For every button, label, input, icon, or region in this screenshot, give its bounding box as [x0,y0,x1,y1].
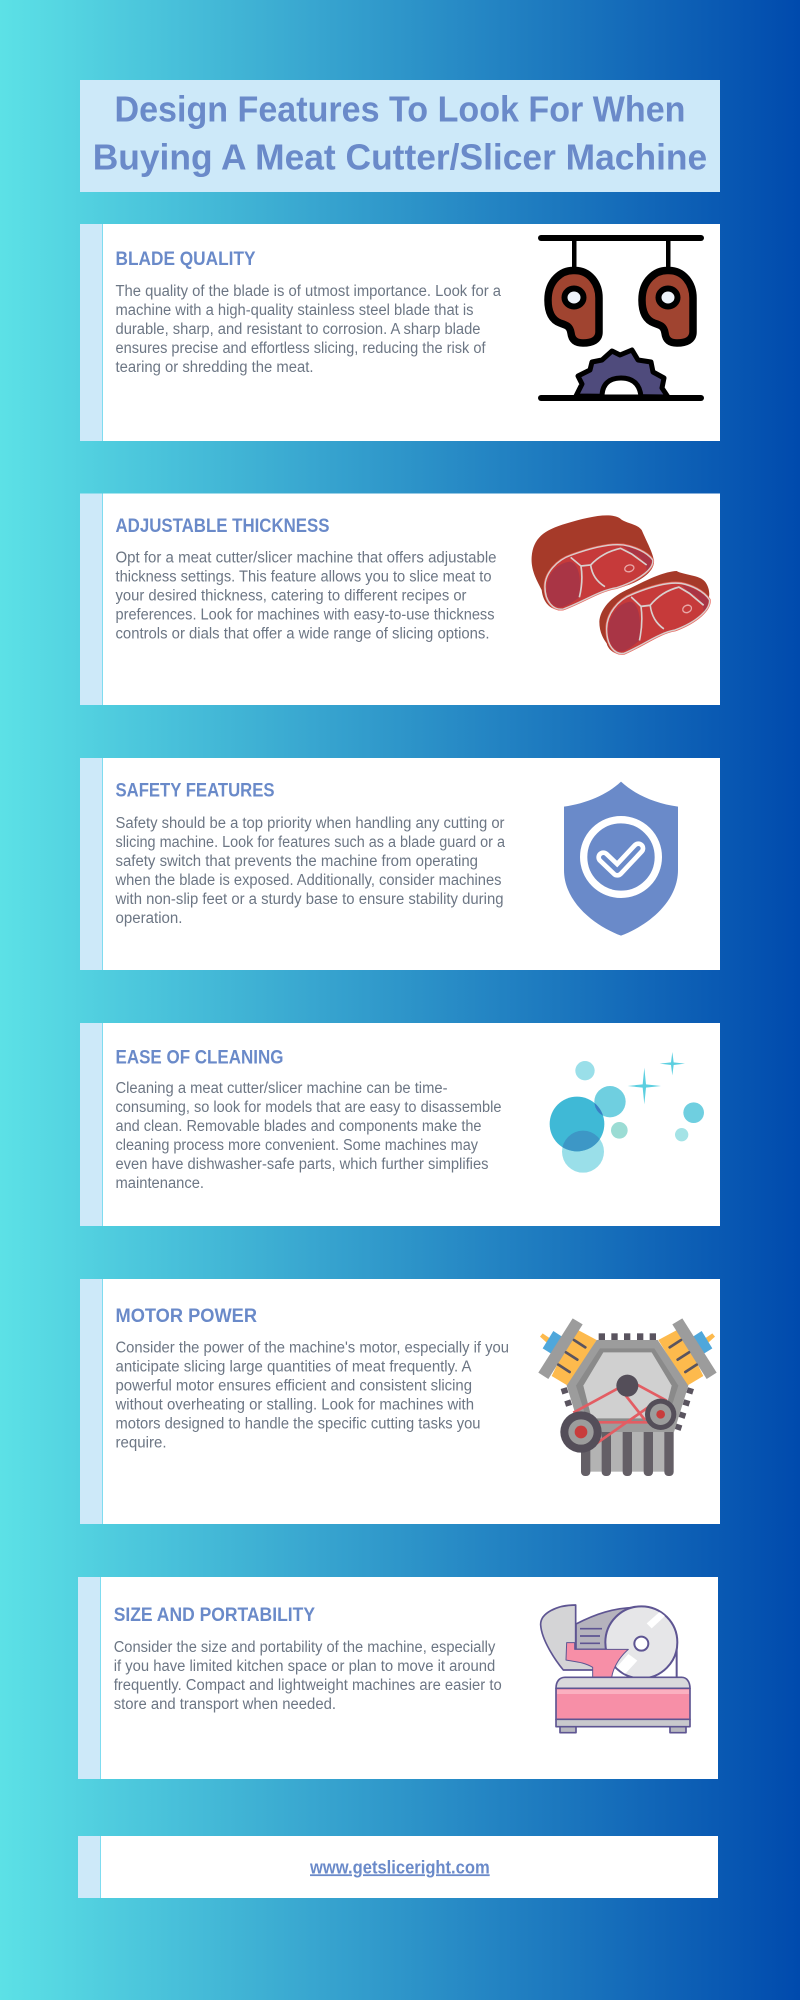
text: adjustable thickness: Opt for a meat cutter/slicer machine that offers adjustable [116,550,496,567]
text: safety features [115,815,505,927]
text: blade quality [116,283,501,376]
website link: www.getsliceright.com [309,1857,490,1877]
text: blade quality: durable, sharp, and resistant to corrosion. A sharp blade [116,321,480,338]
text: adjustable thickness: controls or dials that offer a wide range of slicing options. [116,626,490,643]
heading: blade quality: BLADE QUALITY [116,249,256,270]
text: adjustable thickness: thickness settings. This feature allows you to slice meat to [116,569,492,586]
text: motor power: powerful motor ensures efficient and consistent slicing [116,1378,472,1395]
text: blade quality: ensures precise and effortless slicing, reducing the risk of [116,340,486,357]
icon: meat steaks [532,515,709,654]
text: motor power: Consider the power of the machine's motor, especially if you [116,1340,509,1357]
panel: ease of cleaning [80,1023,720,1226]
text: blade quality: machine with a high-quality stainless steel blade that is [116,302,474,319]
text: motor power: without overheating or stalling. Look for machines with [115,1397,474,1414]
panel: adjustable thickness [80,494,720,705]
panel: website footer [78,1836,718,1898]
panel: motor power [80,1279,720,1524]
text: ease of cleaning: consuming, so look for models that are easy to disassemble [116,1099,502,1116]
text: safety features: slicing machine. Look for features such as a blade guard or a [116,834,505,851]
text: safety features: operation. [116,910,182,927]
text: size and portability: Consider the size and portability of the machine, especially [114,1639,496,1656]
panel: blade quality [80,224,720,441]
icon: bubbles and sparkles [550,1052,704,1173]
panel: size and portability [78,1577,718,1779]
title panel [80,80,720,192]
text: ease of cleaning: maintenance. [116,1175,204,1192]
text: adjustable thickness: preferences. Look for machines with easy-to-use thickness [116,607,495,624]
heading: ease of cleaning: EASE OF CLEANING [116,1048,284,1069]
icon: hanging meat and saw blade [538,235,704,401]
title [93,88,707,178]
text: safety features: when the blade is exposed. Additionally, consider machines [115,872,502,889]
icon: meat slicer machine [541,1605,690,1733]
text: adjustable thickness [116,550,496,643]
title: Buying A Meat Cutter/Slicer Machine [93,136,707,178]
text: safety features: Safety should be a top priority when handling any cutting or [116,815,504,832]
icon: motor engine [538,1318,717,1476]
icon: shield with check [564,782,678,936]
text: size and portability: if you have limited kitchen space or plan to move it around [114,1658,495,1675]
text: size and portability: store and transport when needed. [114,1696,336,1713]
text: adjustable thickness: your desired thickness, catering to different recipes or [116,588,466,605]
text: ease of cleaning: Cleaning a meat cutter/slicer machine can be time- [116,1080,448,1097]
text: safety features: safety switch that prevents the machine from operating [116,853,478,870]
text: ease of cleaning: cleaning process more convenient. Some machines may [116,1137,478,1154]
text: ease of cleaning: and clean. Removable blades and components make the [116,1118,482,1135]
text: motor power: anticipate slicing large quantities of meat frequently. A [116,1359,472,1376]
text: blade quality: The quality of the blade is of utmost importance. Look for a [116,283,501,300]
heading: adjustable thickness: ADJUSTABLE THICKNESS [116,516,330,537]
text: motor power: motors designed to handle the specific cutting tasks you [116,1416,480,1433]
title: Design Features To Look For When [114,88,686,130]
heading: size and portability: SIZE AND PORTABILITY [114,1605,315,1626]
text: safety features: with non-slip feet or a sturdy base to ensure stability during [115,891,503,908]
text: size and portability [114,1639,502,1713]
text: motor power: require. [116,1435,166,1452]
panel: safety features [80,758,720,970]
text: ease of cleaning: even have dishwasher-safe parts, which further simplifies [116,1156,489,1173]
text: size and portability: frequently. Compact and lightweight machines are easier to [114,1677,502,1694]
text: motor power [115,1340,509,1452]
text: blade quality: tearing or shredding the meat. [116,359,314,376]
heading: motor power: MOTOR POWER [116,1306,257,1327]
heading: safety features: SAFETY FEATURES [116,781,274,802]
text: ease of cleaning [116,1080,502,1192]
